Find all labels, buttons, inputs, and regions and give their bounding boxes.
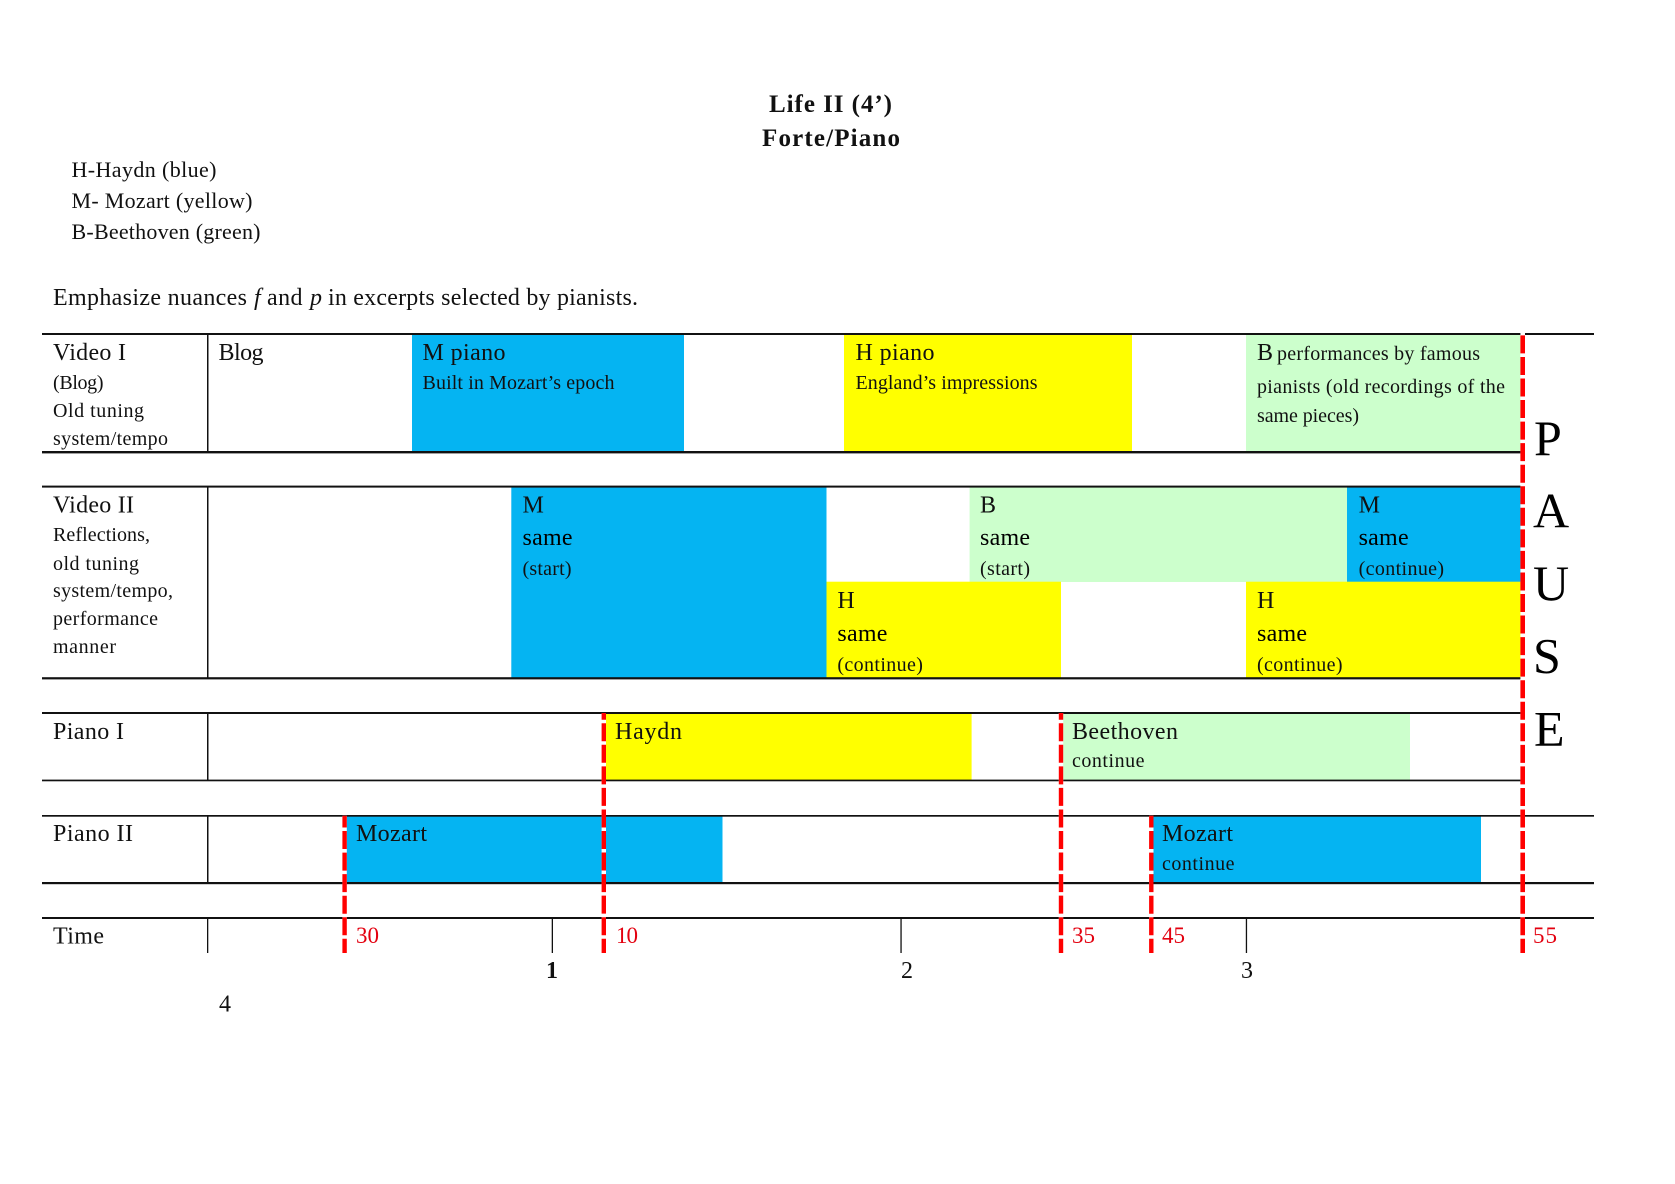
block: M same continue (blue) xyxy=(1347,487,1520,582)
row label: Video II: Reflections, xyxy=(53,524,150,546)
block: M same start (blue): (start) xyxy=(522,558,572,580)
block: M same start (blue): same xyxy=(522,525,572,551)
block: H same continue (yellow, first): H xyxy=(837,588,855,614)
row label: Video I: Old tuning xyxy=(53,400,144,422)
dashed red marker at 55 / pause xyxy=(1520,333,1525,953)
block: M piano (blue) xyxy=(412,335,684,452)
instruction text: in excerpts selected by pianists. xyxy=(328,285,638,311)
block: H same continue (yellow, second): H xyxy=(1257,588,1274,614)
block: H same continue (yellow, first): (continue) xyxy=(837,654,923,676)
axis ticks xyxy=(207,918,1247,953)
block: B performances (green): same pieces) xyxy=(1257,405,1359,427)
red seconds labels: 55 xyxy=(1533,923,1557,948)
block: Mozart continue (blue): continue xyxy=(1162,853,1235,875)
dashed red marker at 35 xyxy=(1059,713,1063,953)
block: M same continue (blue): same xyxy=(1359,525,1409,551)
red seconds labels: 10 xyxy=(616,923,638,948)
PAUSE vertical label: A xyxy=(1533,483,1569,539)
row label: Video II: manner xyxy=(53,636,116,658)
block: Mozart continue (blue): Mozart xyxy=(1162,821,1233,847)
block: M piano (blue): M piano xyxy=(422,340,506,366)
instruction text: Emphasize nuances xyxy=(53,285,247,311)
title xyxy=(762,91,900,152)
block: B performances (green): pianists (old recordings of the xyxy=(1257,376,1505,398)
block: B same start (green): B xyxy=(980,492,996,518)
red seconds labels xyxy=(356,923,1557,948)
dashed red marker at 10 xyxy=(602,713,606,953)
row label: Video I xyxy=(53,340,168,450)
panel: Time axis row xyxy=(42,917,1594,1018)
block: H piano (yellow): England’s impressions xyxy=(856,372,1038,394)
PAUSE vertical label: U xyxy=(1533,555,1569,611)
PAUSE vertical label: E xyxy=(1534,701,1565,757)
row label: Piano I: Piano I xyxy=(53,719,124,745)
row label: Video II: performance xyxy=(53,608,158,630)
row label: Video II: system/tempo, xyxy=(53,580,173,602)
block: B same start (green) xyxy=(970,487,1348,582)
block: Beethoven continue (green): Beethoven xyxy=(1072,719,1178,745)
block: H same continue (yellow, first) xyxy=(826,582,1061,678)
block: Mozart (blue): Mozart xyxy=(356,821,427,847)
row label: Video I: (Blog) xyxy=(53,372,104,394)
block: Haydn (yellow): Haydn xyxy=(615,719,682,745)
instruction text: p xyxy=(308,285,322,311)
axis minute numbers: 1 xyxy=(546,958,558,984)
legend: composers and colours: H-Haydn (blue) xyxy=(72,157,216,182)
title: Life II (4’) xyxy=(769,91,892,118)
row label: Piano II: Piano II xyxy=(53,821,133,847)
instruction text xyxy=(53,285,638,311)
block: M same continue (blue): (continue) xyxy=(1359,558,1444,580)
PAUSE vertical label: S xyxy=(1533,628,1561,684)
row label: Video II: old tuning xyxy=(53,553,139,575)
legend: composers and colours: M- Mozart (yellow) xyxy=(72,188,252,213)
block: M same continue (blue): M xyxy=(1359,492,1380,518)
axis minute numbers: 4 xyxy=(219,992,231,1018)
panel: Piano I row xyxy=(42,712,1520,781)
axis minute numbers: 2 xyxy=(901,958,913,984)
PAUSE vertical label: P xyxy=(1534,410,1562,466)
axis minute numbers: 3 xyxy=(1241,958,1253,984)
axis minute numbers xyxy=(219,958,1253,1018)
row label: Video II: Video II xyxy=(53,492,134,518)
block: H piano (yellow) xyxy=(844,335,1132,452)
block: B same start (green): same xyxy=(980,525,1030,551)
row label: Video I: system/tempo xyxy=(53,428,168,450)
block: H same continue (yellow, second): (continue) xyxy=(1257,654,1342,676)
block: B performances (green): performances by famous xyxy=(1277,343,1480,365)
legend: composers and colours: B-Beethoven (green) xyxy=(72,219,260,244)
block: H same continue (yellow, second): same xyxy=(1257,621,1307,647)
block: M same start (blue) xyxy=(511,487,826,678)
block: Mozart continue (blue) xyxy=(1153,816,1481,883)
block: Mozart (blue) xyxy=(346,816,722,883)
block: H same continue (yellow, second) xyxy=(1246,582,1520,678)
block: H piano (yellow): H piano xyxy=(856,340,934,366)
PAUSE vertical label xyxy=(1533,410,1569,757)
block: Beethoven continue (green): continue xyxy=(1072,750,1145,772)
title: Forte/Piano xyxy=(762,125,900,152)
dashed red marker at 30 xyxy=(342,816,347,953)
block: Beethoven continue (green) xyxy=(1063,714,1410,780)
cell text: Blog: Blog xyxy=(218,340,264,366)
block: H same continue (yellow, first): same xyxy=(837,621,887,647)
instruction text: f xyxy=(254,285,264,311)
block: M piano (blue): Built in Mozart’s epoch xyxy=(422,372,614,394)
block: B performances (green): B xyxy=(1257,340,1273,366)
row label: Video II xyxy=(53,492,173,658)
block: Haydn (yellow) xyxy=(606,714,972,780)
row label: Video I: Video I xyxy=(53,340,126,366)
instruction text: and xyxy=(267,285,302,311)
block: M same start (blue): M xyxy=(522,492,544,518)
panel: Video II row xyxy=(42,486,1520,679)
red seconds labels: 30 xyxy=(356,923,379,948)
panel: Video I row xyxy=(42,333,1594,453)
legend: composers and colours xyxy=(72,157,260,244)
block: B same start (green): (start) xyxy=(980,558,1030,580)
block: B performances (green) xyxy=(1246,335,1520,452)
axis label: Time: Time xyxy=(53,924,104,950)
red seconds labels: 35 xyxy=(1072,923,1095,948)
dashed red marker at 45 xyxy=(1149,816,1154,953)
red seconds labels: 45 xyxy=(1162,923,1185,948)
panel: Piano II row xyxy=(42,815,1594,884)
